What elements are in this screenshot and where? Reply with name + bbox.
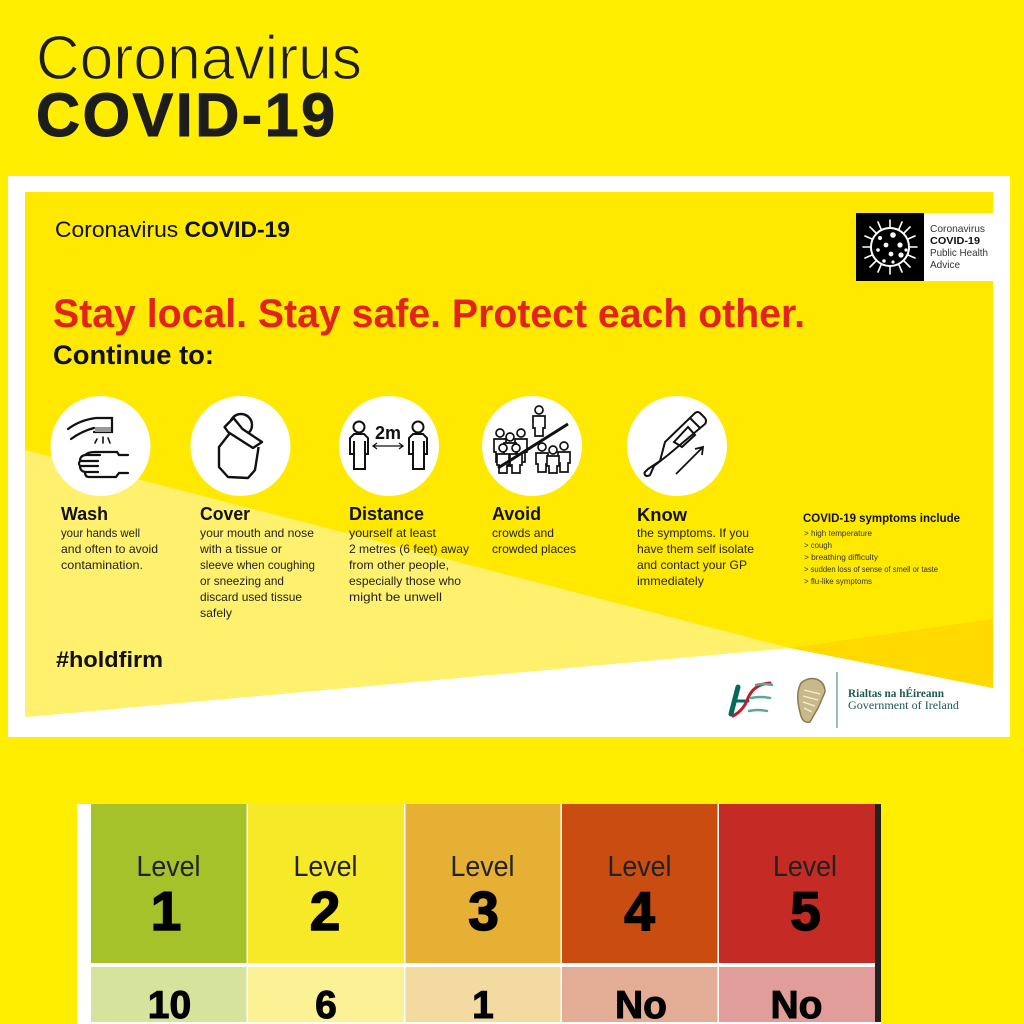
logo: harp bbox=[798, 678, 825, 722]
poster heading: Coronavirus COVID-19 bbox=[55, 217, 290, 242]
symptoms list: > high temperature bbox=[804, 529, 873, 538]
divider bbox=[836, 672, 838, 728]
public health advice badge: Advice bbox=[930, 259, 960, 271]
item: distance: especially those who bbox=[349, 574, 461, 588]
logo: HSE bbox=[731, 683, 772, 716]
level 2 bbox=[248, 804, 404, 963]
item: distance: from other people, bbox=[349, 558, 449, 572]
level 5: Level bbox=[773, 851, 837, 883]
main title: Coronavirus bbox=[36, 24, 362, 93]
item: wash: and often to avoid bbox=[61, 542, 158, 556]
item: cover: discard used tissue bbox=[200, 590, 302, 604]
item: wash: contamination. bbox=[61, 558, 143, 572]
public health advice badge: Public Health bbox=[930, 247, 988, 259]
icon: two people two metres apart bbox=[339, 396, 439, 496]
hashtag: #holdfirm bbox=[56, 647, 163, 672]
icon: thermometer with rising arrow bbox=[627, 396, 727, 496]
item: wash: your hands well bbox=[61, 526, 140, 540]
level 4: Level bbox=[608, 851, 672, 883]
item: distance: 2 metres (6 feet) away bbox=[349, 542, 469, 556]
symptoms list: > cough bbox=[804, 541, 832, 550]
level 4 bbox=[562, 804, 718, 963]
item: cover: your mouth and nose bbox=[200, 526, 314, 540]
item: know: have them self isolate bbox=[637, 542, 754, 556]
icon: hand washing bbox=[50, 396, 150, 496]
logo: government of Ireland text: Rialtas na hÉireann bbox=[848, 686, 944, 700]
panel: public health poster bbox=[8, 176, 1010, 737]
row values bbox=[91, 967, 875, 1024]
level 5: 5 bbox=[790, 880, 821, 942]
item: cover bbox=[190, 396, 315, 620]
item: wash bbox=[50, 396, 158, 572]
symptoms list bbox=[803, 513, 960, 586]
item: distance: Distance bbox=[349, 504, 424, 524]
subheading: Continue to: bbox=[53, 340, 214, 370]
level 2: 2 bbox=[310, 880, 340, 942]
item: cover: with a tissue or bbox=[199, 542, 282, 556]
level 3 bbox=[406, 804, 560, 963]
item: know: immediately bbox=[637, 574, 704, 588]
symptoms list: > breathing difficulty bbox=[804, 553, 878, 562]
logo: government of Ireland text: Government of Ireland bbox=[848, 698, 959, 712]
gold wedge background bbox=[790, 619, 993, 688]
item: distance bbox=[339, 396, 469, 604]
table: alert levels bbox=[77, 804, 881, 1024]
level 3: Level bbox=[450, 851, 514, 883]
icon: virus bbox=[863, 220, 917, 274]
item: wash: Wash bbox=[61, 504, 108, 524]
main title bbox=[36, 24, 362, 149]
main title: COVID-19 bbox=[36, 81, 335, 149]
symptoms list: > sudden loss of sense of smell or taste bbox=[804, 565, 939, 574]
icon: person coughing into elbow bbox=[190, 396, 290, 496]
symptoms list: COVID-19 symptoms include bbox=[803, 513, 960, 525]
item: avoid: crowded places bbox=[492, 542, 576, 556]
headline: Stay local. Stay safe. Protect each other. bbox=[53, 292, 805, 336]
item: distance: yourself at least bbox=[349, 526, 437, 540]
level 5 bbox=[719, 804, 875, 963]
public health advice badge: Coronavirus bbox=[930, 223, 985, 235]
item: avoid: Avoid bbox=[492, 504, 541, 524]
level 1: Level bbox=[136, 851, 200, 883]
item: distance: might be unwell bbox=[349, 590, 442, 604]
item: know: and contact your GP bbox=[637, 558, 747, 572]
item: cover: safely bbox=[200, 606, 232, 620]
public health advice badge bbox=[856, 213, 993, 281]
icon: crowd crossed out bbox=[482, 396, 582, 496]
item: avoid: crowds and bbox=[492, 526, 554, 540]
public health advice badge: COVID-19 bbox=[930, 235, 980, 247]
icon: two people two metres apart: 2m bbox=[375, 423, 401, 443]
light wedge background bbox=[25, 450, 790, 717]
item: cover: Cover bbox=[200, 504, 250, 524]
level 1 bbox=[91, 804, 246, 963]
item: cover: or sneezing and bbox=[200, 574, 284, 588]
symptoms list: > flu-like symptoms bbox=[804, 577, 872, 586]
item: know: the symptoms. If you bbox=[637, 526, 749, 540]
level 3: 3 bbox=[468, 880, 499, 942]
level 4: 4 bbox=[624, 880, 655, 942]
level 2: Level bbox=[294, 851, 358, 883]
item: know: Know bbox=[637, 505, 688, 525]
item: know bbox=[627, 396, 754, 588]
logo: government of Ireland text bbox=[848, 686, 959, 712]
item: cover: sleeve when coughing bbox=[200, 558, 315, 572]
level 1: 1 bbox=[151, 880, 181, 942]
item: avoid bbox=[482, 396, 582, 556]
